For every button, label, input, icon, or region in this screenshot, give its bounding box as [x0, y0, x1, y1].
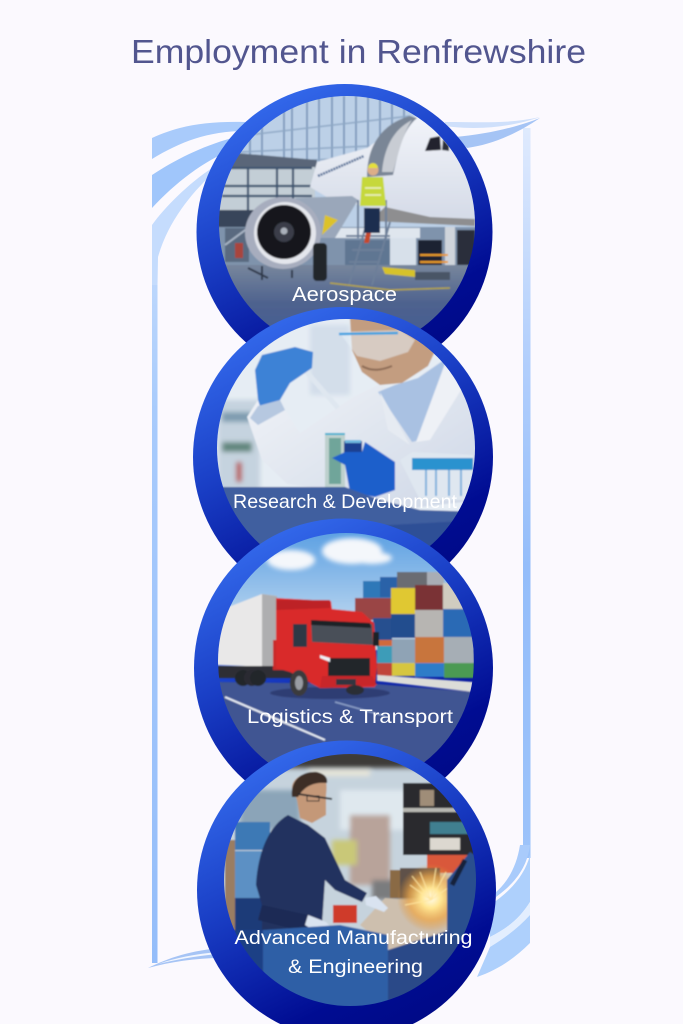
ring: research	[193, 307, 493, 607]
label: Aerospace: Aerospace	[292, 283, 397, 306]
photo: truck and containers	[218, 533, 474, 762]
panel: advanced manufacturing and engineering	[197, 740, 496, 1024]
decorative frame with swooshes	[148, 117, 540, 977]
label: Logistics & Transport: Logistics & Transport	[247, 706, 454, 728]
photo: engineer at workbench	[220, 750, 482, 1015]
title: Employment in Renfrewshire	[131, 33, 586, 70]
ring: manufacturing	[197, 740, 496, 1024]
label: Research & Development: Research & Development	[233, 491, 458, 513]
photo: scientist in lab	[217, 319, 475, 546]
panel: logistics and transport	[194, 518, 493, 780]
label: Advanced Manufacturing & Engineering	[234, 927, 472, 978]
panel: research and development	[193, 307, 493, 564]
panel: aerospace	[196, 84, 492, 344]
label: Advanced Manufacturing & Engineering: & Engineering	[288, 956, 423, 978]
ring: logistics	[194, 518, 493, 818]
photo: aircraft at airport	[219, 96, 475, 328]
label: Advanced Manufacturing & Engineering: Advanced Manufacturing	[234, 927, 472, 949]
ring: aerospace	[196, 84, 492, 380]
